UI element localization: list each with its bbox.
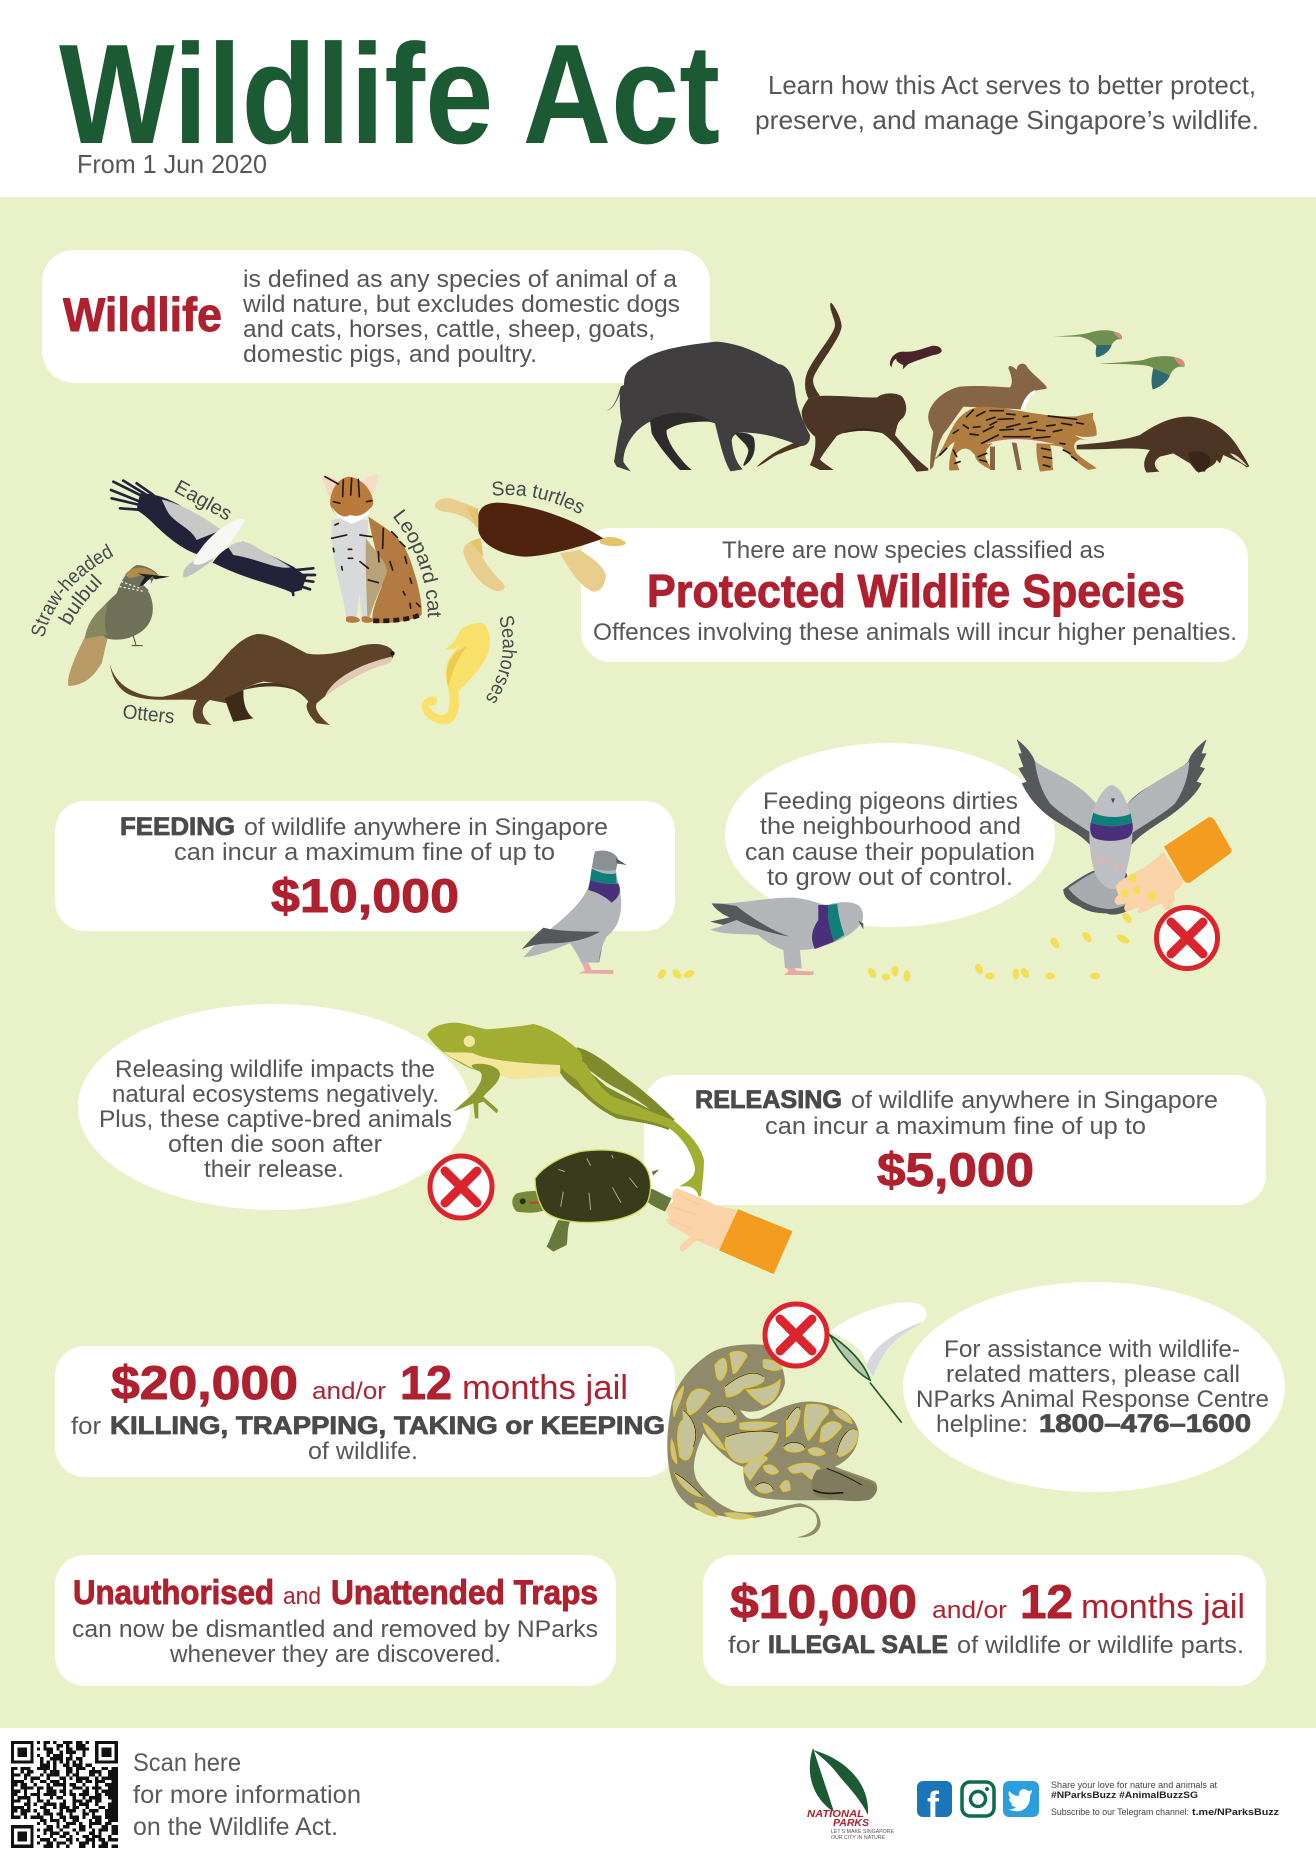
callout: releasing wildlife: Plus, these captive-bred animals: [99, 1106, 452, 1133]
footer: social text: [1051, 1780, 1280, 1817]
panel: illegal sale: ILLEGAL SALE: [768, 1631, 948, 1659]
icon: wild boar: [606, 342, 810, 471]
icon: straw-headed bulbul: [68, 565, 170, 686]
illustration: terrapin: [512, 1150, 672, 1252]
icon: small clawed otter silhouette: [890, 346, 942, 369]
panel: traps: [55, 1555, 616, 1686]
callout: releasing wildlife: their release.: [204, 1156, 344, 1183]
panel: feeding fine: [55, 801, 675, 931]
panel: releasing fine: RELEASING: [695, 1086, 842, 1114]
callout: feeding pigeons: the neighbourhood and: [760, 813, 1021, 840]
subtitle: [755, 70, 1259, 135]
definition text: [242, 266, 680, 368]
labels: species names: [32, 476, 584, 728]
panel: killing penalty: 12: [400, 1356, 452, 1409]
icon: leopard cat walking: [935, 407, 1097, 472]
panel: releasing fine: [644, 1075, 1266, 1205]
panel: killing penalty: $20,000: [111, 1356, 298, 1409]
labels: species names: Eagles: [171, 476, 235, 525]
footer: scan text: for more information: [133, 1781, 361, 1809]
panel: killing penalty: [55, 1346, 675, 1477]
labels: species names: Seahorses: [486, 616, 517, 703]
footer: scan text: [133, 1749, 361, 1841]
panel: feeding fine: can incur a maximum fine of up to: [174, 839, 555, 866]
footer: social text: #NParksBuzz #AnimalBuzzSG: [1051, 1790, 1198, 1800]
footer: National Parks logo: OUR CITY IN NATURE: [831, 1835, 885, 1841]
panel: releasing fine: can incur a maximum fine of up to: [765, 1113, 1146, 1140]
illustration: pigeon standing: [522, 851, 627, 974]
icon: Facebook: [917, 1781, 952, 1825]
panel: illegal sale: 12: [1020, 1575, 1073, 1628]
callout: releasing wildlife: Releasing wildlife impacts the: [115, 1056, 435, 1083]
callout: feeding pigeons: [725, 743, 1055, 927]
callout: releasing wildlife: natural ecosystems negatively.: [112, 1081, 439, 1108]
panel: killing penalty: for: [71, 1413, 101, 1440]
panel: wildlife definition: [42, 250, 710, 383]
footer: National Parks logo: NATIONAL: [807, 1808, 864, 1820]
definition text: wild nature, but excludes domestic dogs: [242, 291, 680, 318]
icon: prohibition sign, python: [765, 1304, 827, 1366]
illustration: feather and leaf: [830, 1302, 927, 1423]
definition text: and cats, horses, cattle, sheep, goats,: [243, 316, 655, 343]
definition text: is defined as any species of animal of a: [243, 266, 677, 293]
panel: protected wildlife species: Offences involving these animals will incur higher penalties.: [593, 619, 1237, 646]
effective date: From 1 Jun 2020: [77, 149, 267, 179]
panel: killing penalty: of wildlife.: [308, 1438, 418, 1465]
footer: social text: Subscribe to our Telegram channel:: [1051, 1807, 1189, 1817]
panel: protected wildlife species: [581, 528, 1248, 662]
footer: National Parks logo: [807, 1748, 894, 1841]
callout: helpline: helpline:: [936, 1411, 1028, 1438]
icon: pangolin: [1077, 417, 1249, 473]
fine amount: $5,000: [877, 1143, 1034, 1196]
footer: social text: Share your love for nature and animals at: [1051, 1780, 1218, 1790]
panel: traps: Unauthorised: [73, 1574, 274, 1612]
icon: otter: [110, 634, 395, 725]
footer: QR code: [11, 1741, 118, 1848]
icon: sea turtle: [435, 498, 626, 592]
illustration: releasing hand: [666, 1188, 792, 1273]
panel: feeding fine: FEEDING: [120, 813, 235, 841]
fine amount: $10,000: [271, 869, 459, 922]
labels: species names: Otters: [121, 701, 175, 728]
callout: helpline: NParks Animal Response Centre: [916, 1386, 1269, 1413]
labels: species names: Sea turtles: [492, 481, 584, 514]
footer: scan text: Scan here: [133, 1749, 241, 1777]
icon: Instagram: [962, 1782, 994, 1816]
illustration: non-protected animal parade: [606, 303, 1249, 473]
definition text: domestic pigs, and poultry.: [243, 341, 537, 368]
panel: traps: whenever they are discovered.: [169, 1641, 501, 1668]
callout: releasing wildlife: often die soon after: [168, 1131, 382, 1158]
title: Wildlife Act: [59, 15, 720, 174]
panel: illegal sale: $10,000: [730, 1575, 917, 1628]
panel: illegal sale: [703, 1555, 1266, 1686]
icon: mouse deer: [928, 364, 1047, 470]
icon: leopard cat sitting: [322, 474, 422, 623]
subtitle: Learn how this Act serves to better protect,: [768, 70, 1256, 100]
icon: macaque: [757, 303, 928, 472]
icon: Facebook: f: [927, 1784, 940, 1825]
footer: National Parks logo: LET’S MAKE SINGAPORE: [831, 1829, 894, 1835]
illustration: flying pigeon and feeding hand: [1017, 739, 1232, 915]
panel: protected wildlife species: There are now species classified as: [722, 537, 1105, 564]
callout: helpline: [903, 1282, 1285, 1492]
heading: Protected Wildlife Species: Protected Wildlife Species: [647, 565, 1185, 617]
footer: social text: t.me/NParksBuzz: [1192, 1807, 1280, 1817]
panel: feeding fine: of wildlife anywhere in Singapore: [244, 814, 608, 841]
panel: illegal sale: for: [728, 1632, 760, 1659]
icon: parakeets: [1053, 330, 1185, 389]
callout: releasing wildlife: [78, 1004, 470, 1210]
panel: killing penalty: and/or: [312, 1378, 386, 1405]
labels: species names: Leopard cat: [393, 509, 441, 618]
illustration: pigeon pecking: [710, 898, 863, 975]
panel: killing penalty: months jail: [462, 1369, 628, 1407]
icon: prohibition sign, releasing: [430, 1156, 492, 1218]
footer: scan text: on the Wildlife Act.: [133, 1813, 338, 1841]
panel: illegal sale: of wildlife or wildlife parts.: [957, 1632, 1244, 1659]
panel: killing penalty: KILLING, TRAPPING, TAKING or KEEPING: [110, 1412, 665, 1440]
panel: releasing fine: of wildlife anywhere in Singapore: [851, 1087, 1218, 1114]
illustration: scattered pigeon feed: [656, 911, 1134, 982]
panel: traps: and: [283, 1583, 321, 1610]
icon: Twitter: [1003, 1781, 1039, 1817]
labels: species names: Straw-headed: [32, 544, 114, 636]
panel: illegal sale: and/or: [932, 1597, 1007, 1624]
panel: traps: Unattended Traps: [331, 1574, 598, 1612]
illustration: frog: [427, 1023, 704, 1197]
subtitle: preserve, and manage Singapore’s wildlife.: [755, 105, 1259, 135]
illustration: protected species: [32, 474, 626, 728]
icon: eagle: [111, 481, 315, 595]
callout: feeding pigeons: to grow out of control.: [767, 864, 1013, 891]
illustration: python: [667, 1344, 877, 1537]
panel: traps: can now be dismantled and removed by NParks: [72, 1616, 598, 1643]
panel: illegal sale: months jail: [1081, 1588, 1245, 1626]
icon: seahorse: [422, 623, 490, 724]
footer: National Parks logo: PARKS: [833, 1817, 869, 1829]
labels: species names: bulbul: [58, 574, 102, 625]
callout: helpline: 1800–476–1600: [1039, 1410, 1251, 1438]
callout: feeding pigeons: can cause their population: [745, 839, 1035, 866]
callout: feeding pigeons: Feeding pigeons dirties: [763, 788, 1018, 815]
icon: prohibition sign, feeding: [1156, 908, 1218, 968]
callout: helpline: related matters, please call: [946, 1361, 1240, 1388]
callout: helpline: For assistance with wildlife-: [944, 1336, 1240, 1363]
heading: Wildlife: Wildlife: [63, 288, 222, 341]
